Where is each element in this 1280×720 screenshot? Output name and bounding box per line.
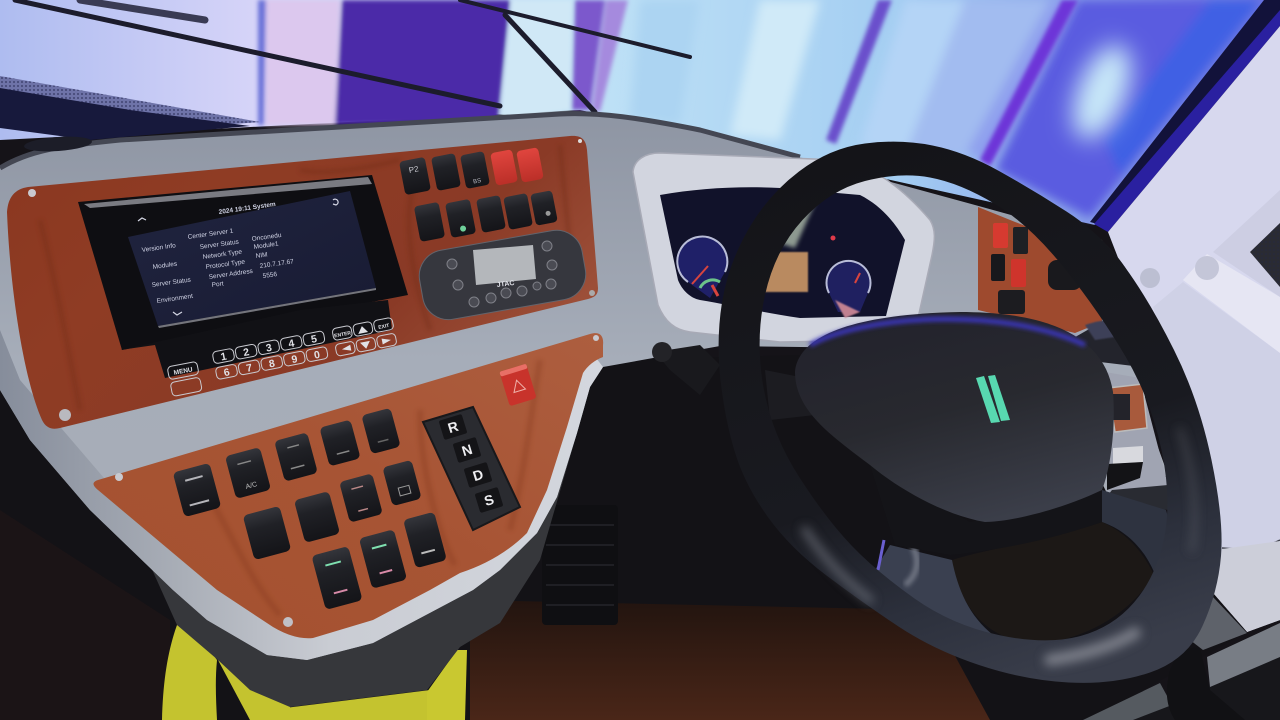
keypad: MENU — [173, 366, 194, 377]
display screen: Center Server 1 — [187, 228, 234, 241]
brake pedal — [542, 505, 618, 625]
keypad: EXIT — [378, 323, 390, 331]
dark opening inside wheel — [952, 522, 1154, 643]
keypad: 4 — [287, 337, 296, 350]
upper rocker switches: BS — [473, 178, 482, 185]
display screen: Server Status — [199, 238, 240, 251]
gear selector R N D S — [423, 407, 520, 530]
silver dashboard body — [0, 114, 1168, 660]
upper rocker switches: P2 — [408, 164, 420, 175]
climate control panel: JTAC — [496, 280, 515, 289]
side control pod — [1100, 372, 1172, 510]
wheel hub — [795, 312, 1114, 555]
display screen: Server Status — [151, 276, 192, 289]
display screen: 5556 — [262, 271, 278, 280]
icon: wheel logo — [976, 375, 1010, 423]
display screen: Onconedu — [251, 232, 282, 243]
display screen: Module1 — [253, 241, 279, 251]
display screen: 210.7.17.67 — [259, 258, 295, 270]
windshield wipers — [15, 0, 690, 112]
wheel rim — [719, 142, 1222, 683]
keypad: 1 — [220, 351, 228, 363]
gear selector R N D S: N — [460, 441, 474, 459]
dash underbody — [150, 433, 577, 707]
right window pillar — [1090, 0, 1280, 632]
lower wood panel — [94, 333, 603, 638]
display screen: Version Info — [141, 242, 177, 254]
display screen: Protocol Type — [205, 258, 246, 271]
display screen: Environment — [156, 293, 194, 305]
windshield with purple reflections — [0, 0, 1280, 225]
display screen: 2024 19:11 System — [218, 201, 276, 216]
gear selector R N D S: S — [482, 491, 496, 509]
gear selector R N D S: D — [471, 466, 485, 484]
climate control panel — [415, 226, 590, 324]
instrument cluster — [633, 153, 934, 342]
floor and footwell — [0, 350, 1247, 720]
display screen — [128, 191, 376, 328]
upper rocker switches — [399, 147, 558, 242]
lower control switches — [173, 408, 447, 610]
keypad: 6 — [223, 366, 231, 379]
steering wheel — [719, 142, 1222, 683]
lower control switches: A/C — [245, 481, 258, 491]
display screen: Modules — [152, 261, 178, 271]
keypad — [166, 317, 399, 396]
rim highlights — [805, 430, 1195, 660]
right wood switch panel — [978, 207, 1128, 333]
orange lcd — [754, 252, 808, 292]
keypad: 9 — [290, 353, 299, 366]
keypad: 5 — [310, 333, 318, 346]
red hazard button — [499, 364, 537, 406]
keypad: 3 — [265, 342, 273, 355]
right gauge — [826, 261, 870, 318]
main display unit — [78, 175, 408, 396]
display screen: Port — [211, 280, 224, 289]
steering column stalk — [652, 342, 720, 395]
keypad: 7 — [245, 362, 254, 375]
upper wood panel — [7, 136, 598, 429]
keypad: ENTER — [334, 330, 352, 340]
keypad: 2 — [242, 346, 250, 359]
left gauge — [677, 237, 727, 298]
yellow seat frame — [162, 625, 467, 720]
keypad: 0 — [313, 349, 321, 362]
display screen: NIM — [255, 251, 268, 260]
display screen: Server Address — [208, 268, 254, 281]
display screen: Network Type — [202, 248, 243, 261]
lower door step with clamp — [1083, 597, 1280, 720]
wheel spokes — [765, 315, 1180, 640]
gear selector R N D S: R — [446, 418, 460, 436]
keypad: 8 — [268, 358, 276, 370]
